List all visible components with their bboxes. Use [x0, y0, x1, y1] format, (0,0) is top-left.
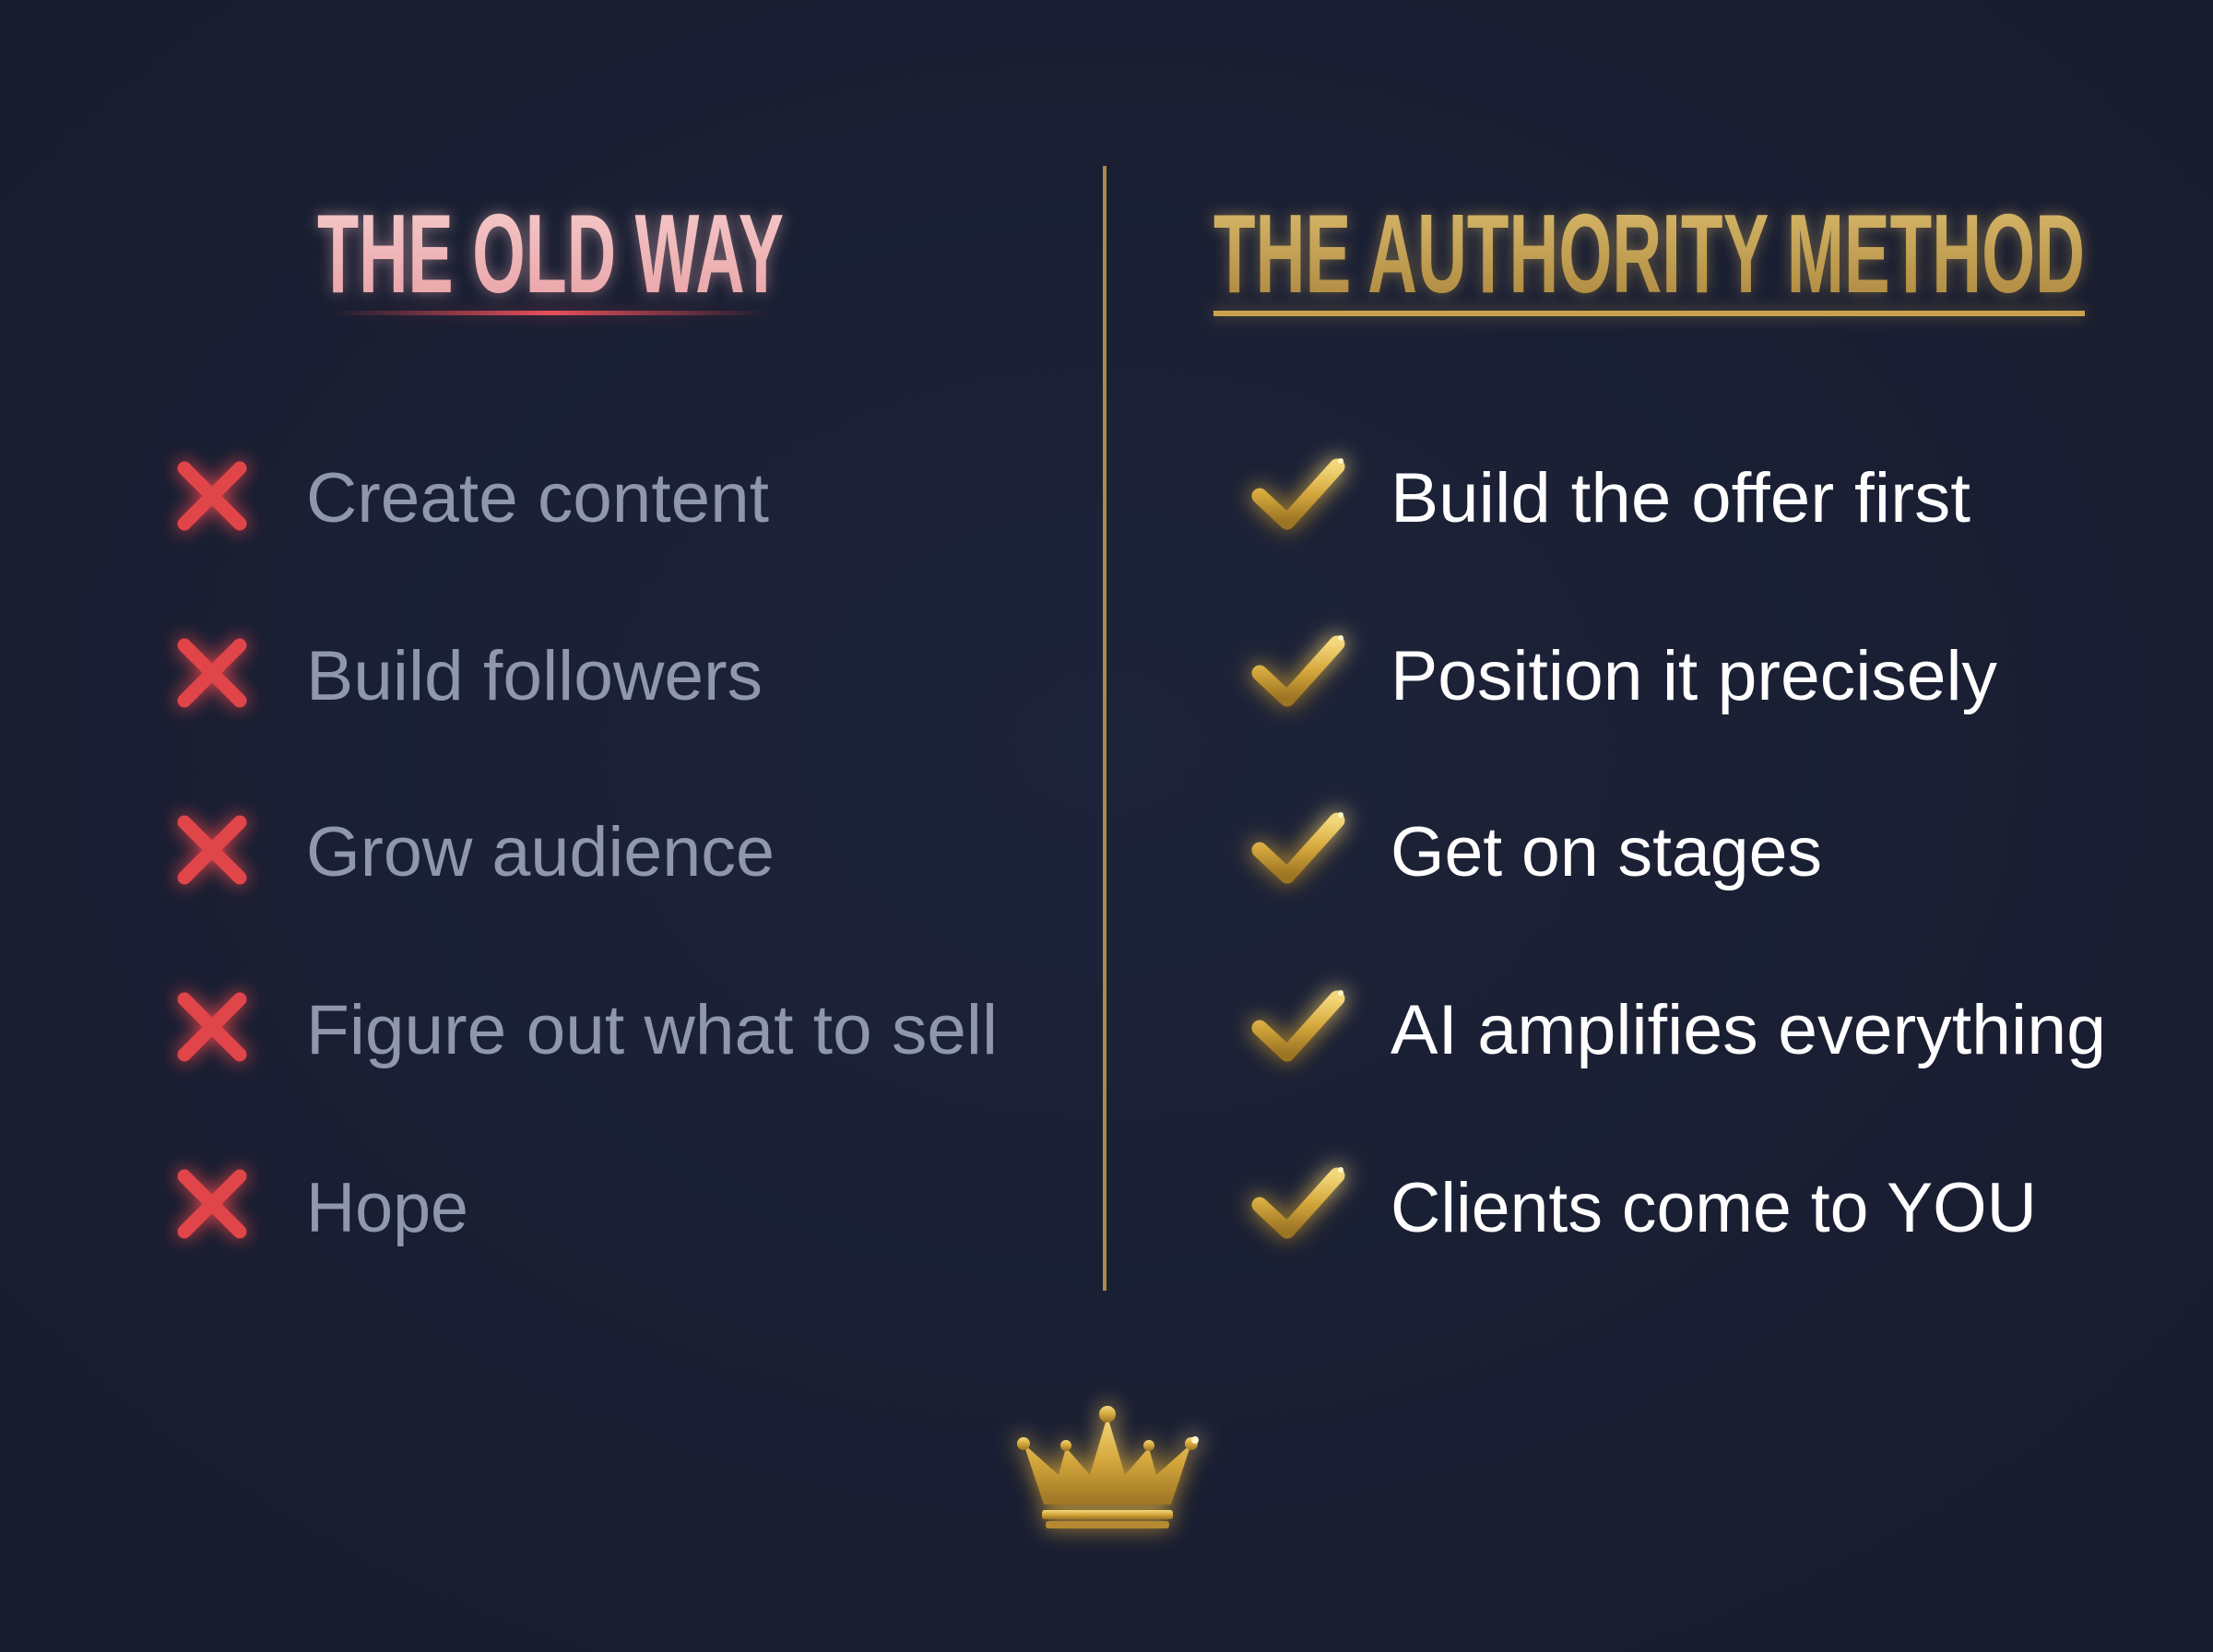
- item: hope: Hope: [306, 1169, 468, 1247]
- item: position: Position it precisely: [1391, 637, 1997, 715]
- item: grow audience: Grow audience: [306, 813, 775, 891]
- item: build the offer: Build the offer first: [1391, 459, 1970, 537]
- title: the old way: [317, 191, 784, 316]
- item: figure out: Figure out what to sell: [306, 991, 998, 1069]
- list: authority method: [1260, 458, 2106, 1247]
- title: the old way: THE OLD WAY: [317, 191, 784, 316]
- item: clients: Clients come to YOU: [1391, 1169, 2037, 1247]
- item: create content: Create content: [306, 459, 769, 537]
- item: hope: [184, 1169, 468, 1247]
- item: AI: AI amplifies everything: [1391, 991, 2106, 1069]
- icon: crown: [1017, 1406, 1199, 1528]
- item: stages: Get on stages: [1391, 813, 1822, 891]
- item: build followers: Build followers: [306, 637, 763, 715]
- list: old way: [184, 459, 998, 1247]
